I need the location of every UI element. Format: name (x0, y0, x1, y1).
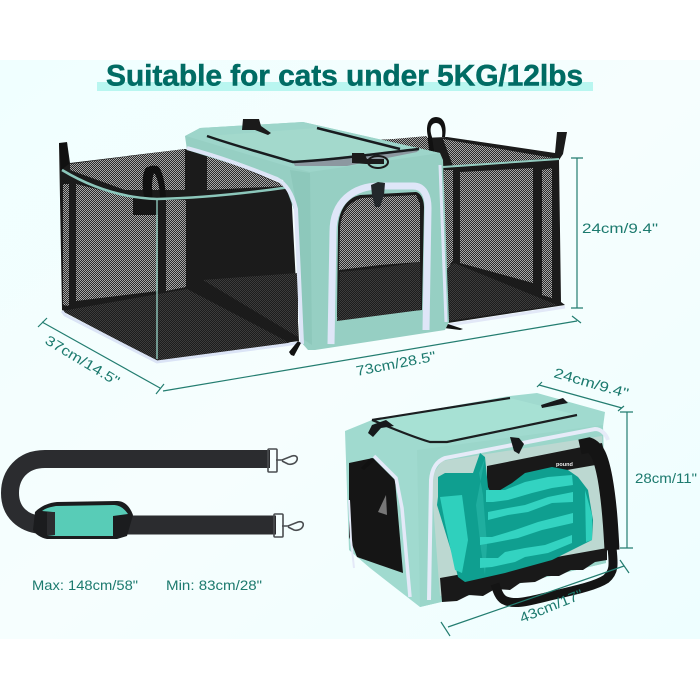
strap pad (33, 501, 133, 539)
shoulder strap (495, 445, 613, 603)
dimension: 73cm width: 73cm/28.5" (355, 348, 437, 379)
strap length: max: Max: 148cm/58" (32, 577, 138, 593)
side D-ring (352, 153, 388, 168)
strap buckles (368, 398, 568, 437)
centre cube (185, 119, 449, 350)
left mesh pod (59, 142, 299, 362)
dimension: 24cm height: 24cm/9.4" (582, 220, 658, 236)
brand tag: pound (556, 462, 573, 468)
dimension: 28cm height (620, 412, 697, 548)
lid (372, 398, 577, 442)
top strap (242, 119, 271, 135)
side window (349, 456, 410, 597)
dimension: 24cm depth (537, 365, 631, 411)
arched door (331, 182, 428, 344)
dimension: 37cm depth (38, 318, 164, 394)
zipper pull (289, 341, 301, 356)
lid (207, 128, 401, 162)
title: Suitable for cats under 5KG/12lbs (106, 60, 583, 92)
upper clip (268, 449, 297, 472)
carrier body (345, 393, 606, 607)
dimension: 24cm depth: 24cm/9.4" (552, 365, 631, 401)
front window (429, 429, 608, 602)
dimension: 43cm width: 43cm/17" (517, 586, 585, 626)
expanded carrier with side pods (59, 117, 567, 362)
strap length: min: Min: 83cm/28" (166, 577, 262, 593)
right mesh pod (370, 117, 567, 330)
lower clip (274, 514, 303, 537)
dimension: 73cm width (163, 316, 581, 391)
dimension: 37cm depth: 37cm/14.5" (42, 332, 123, 389)
dimension: 43cm width (441, 560, 629, 636)
adjustable shoulder strap (10, 449, 303, 539)
dimension: 24cm height (571, 158, 658, 308)
folded carrier (345, 393, 613, 607)
dimension: 28cm height: 28cm/11" (635, 470, 697, 486)
cat silhouette (437, 453, 593, 582)
